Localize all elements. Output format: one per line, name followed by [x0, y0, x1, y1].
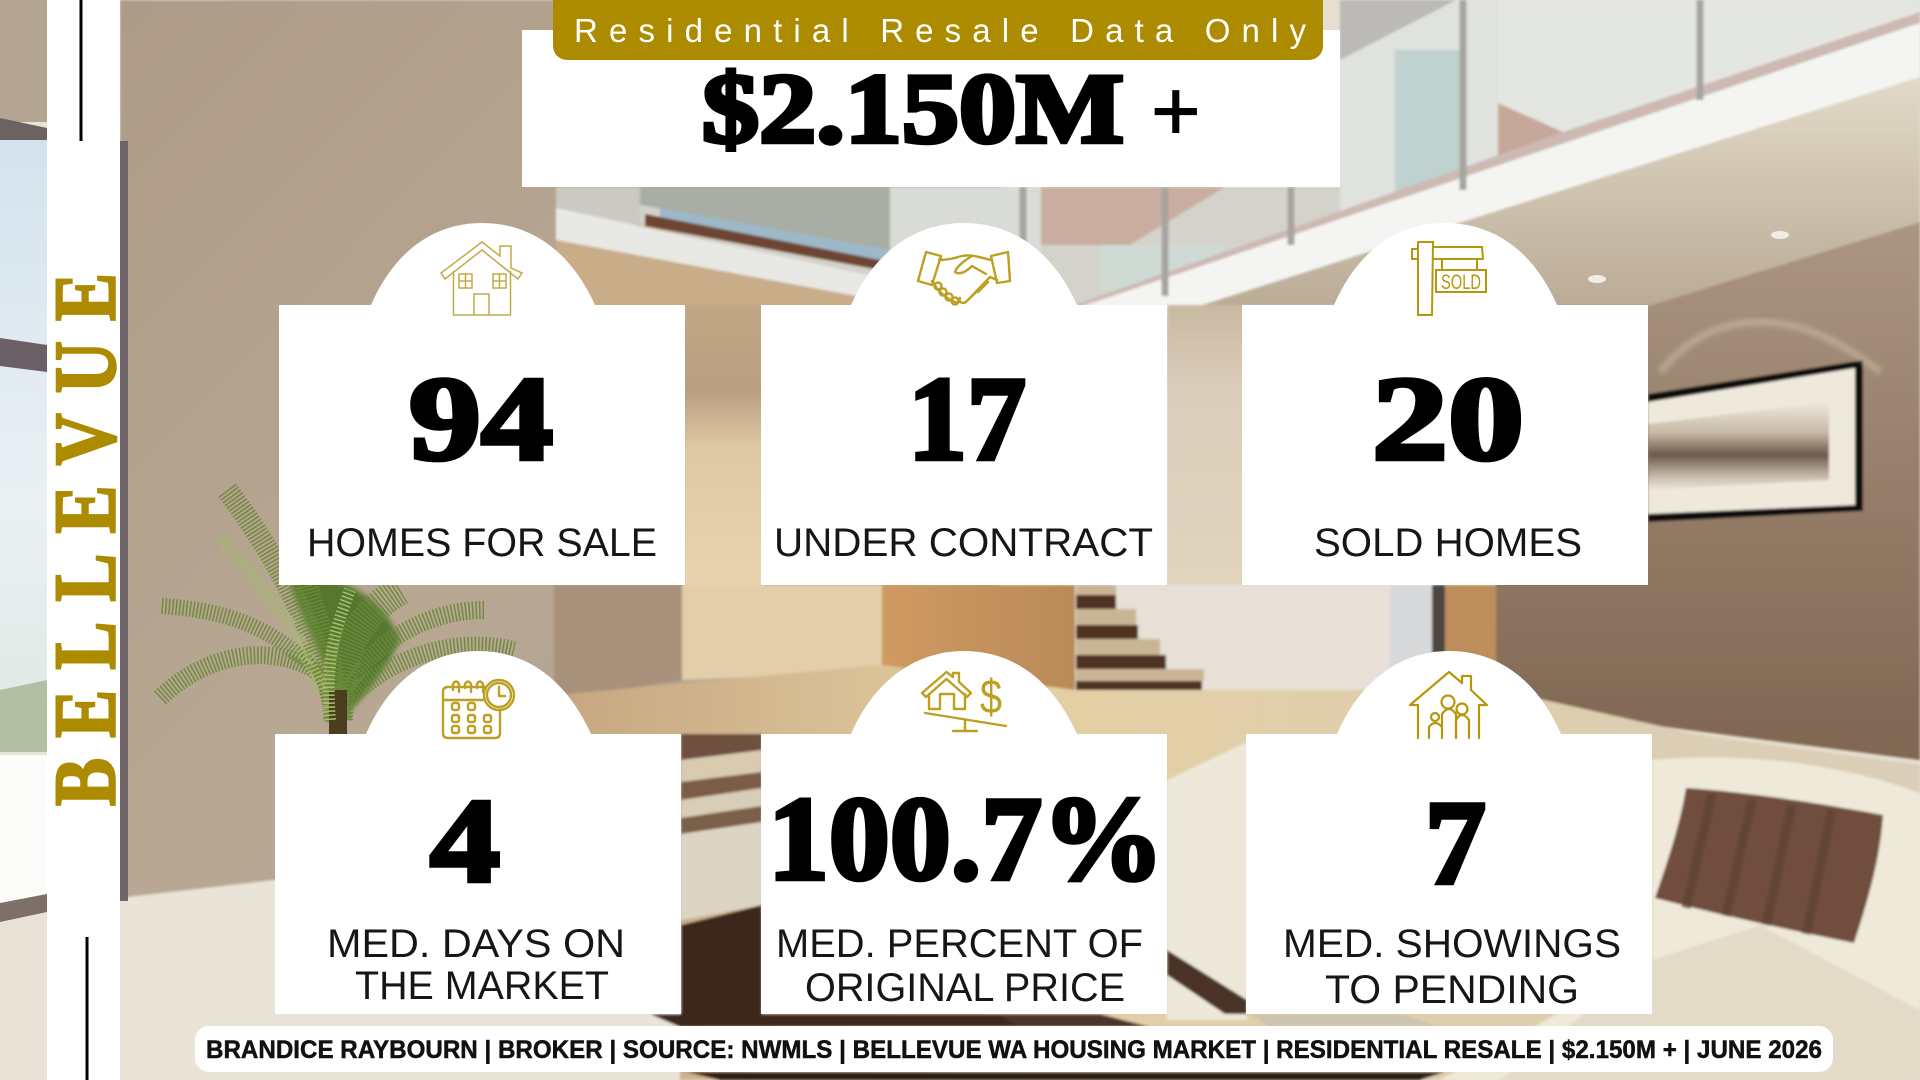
- spotlights on ceiling: [1588, 231, 1789, 283]
- icon: calendar with clock: [443, 680, 514, 738]
- label: TO PENDING: [1325, 968, 1579, 1012]
- label: SOLD HOMES: [1314, 521, 1582, 565]
- card shape: [1242, 223, 1648, 585]
- value: 94: [409, 352, 553, 485]
- card shape: [761, 651, 1167, 1014]
- label: THE MARKET: [355, 964, 609, 1008]
- card shape: [279, 223, 685, 585]
- sidebar top rule: [80, 0, 82, 141]
- city name: BELLEVUE: [37, 273, 134, 806]
- icon: house and dollar on scale: [922, 671, 1006, 731]
- label: MED. DAYS ON: [327, 922, 625, 966]
- plus sign: +: [1151, 64, 1201, 159]
- label: MED. SHOWINGS: [1283, 922, 1621, 966]
- icon: family in house: [1410, 672, 1487, 738]
- label: HOMES FOR SALE: [307, 521, 657, 565]
- label: [327, 922, 625, 1008]
- banner text: Residential Resale Data Only: [574, 12, 1306, 49]
- label: ORIGINAL PRICE: [805, 966, 1125, 1010]
- banner: [553, 0, 1323, 60]
- panel: under contract: [761, 223, 1167, 585]
- left window view: [0, 0, 47, 1080]
- label: [776, 922, 1143, 1010]
- value: 7: [1425, 776, 1486, 909]
- card shape: [275, 651, 681, 1014]
- panel: homes for sale: [279, 223, 685, 585]
- value: 20: [1372, 352, 1524, 485]
- wall light arcs: [1660, 322, 1880, 372]
- footer text: BRANDICE RAYBOURN | BROKER | SOURCE: NWMLS | BELLEVUE WA HOUSING MARKET | RESIDENTIAL RESALE | $2.150M + | JUNE 2026: [206, 1036, 1822, 1064]
- sidebar bottom rule: [86, 937, 88, 1080]
- value: 100.7%: [768, 772, 1164, 905]
- panel: median percent of original price: [761, 651, 1167, 1014]
- plant: potted palm fronds: [160, 490, 514, 735]
- label: MED. PERCENT OF: [776, 922, 1143, 966]
- dollar sign: $: [980, 671, 1002, 724]
- icon: handshake: [918, 252, 1010, 304]
- footer bar: [195, 1026, 1833, 1072]
- sidebar: white vertical strip: [37, 0, 134, 1080]
- value: 17: [908, 352, 1026, 485]
- card shape: [1246, 651, 1652, 1014]
- title panel: [522, 30, 1340, 187]
- sidebar shadow strip: [120, 141, 128, 901]
- label: UNDER CONTRACT: [774, 521, 1153, 565]
- panel: median days on market: [275, 651, 681, 1014]
- panel: sold homes: [1242, 223, 1648, 585]
- card shape: [761, 223, 1167, 585]
- icon: house: [441, 242, 522, 315]
- value: 4: [430, 774, 500, 907]
- label: [1283, 922, 1621, 1012]
- sign text: SOLD: [1441, 271, 1481, 294]
- panel: median showings to pending: [1246, 651, 1652, 1014]
- price heading: $2.150M: [702, 53, 1124, 164]
- icon: sold sign: [1412, 242, 1486, 315]
